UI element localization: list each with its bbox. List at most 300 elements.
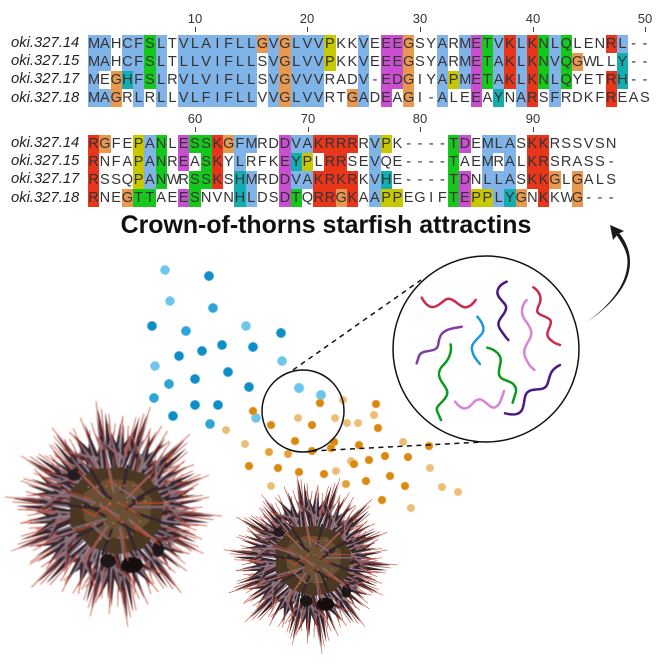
- sequence alignment: residues 1-50: N: [538, 54, 549, 70]
- sequence alignment: residues 1-50: S: [415, 36, 425, 52]
- sequence alignment: residues 1-50: D: [572, 90, 583, 106]
- sequence alignment: residues 1-50: T: [337, 90, 346, 106]
- sequence alignment: residues 1-50: F: [224, 90, 233, 106]
- sequence alignment: residues 51-97: H: [235, 172, 245, 188]
- magnifier circle: large with peptides: [393, 256, 579, 442]
- sequence alignment: residues 51-97: F: [438, 190, 447, 206]
- sequence alignment: residues 1-50: L: [517, 72, 525, 88]
- sequence alignment: residues 1-50: L: [157, 72, 165, 88]
- sequence alignment: residues 1-50: -: [642, 36, 647, 52]
- sequence alignment: residues 51-97: A: [505, 154, 515, 170]
- sequence alignment: residues 1-50: H: [111, 36, 121, 52]
- sequence alignment: residues 1-50: Y: [426, 54, 436, 70]
- sequence alignment: residues 51-97: A: [122, 154, 132, 170]
- sequence alignment: residues 1-50: -: [642, 54, 647, 70]
- sequence alignment: residues 51-97: L: [495, 172, 503, 188]
- sequence alignment: residues 51-97: L: [315, 154, 323, 170]
- sequence alignment: residues 51-97: N: [156, 154, 166, 170]
- sequence alignment: residues 51-97: D: [257, 190, 268, 206]
- sequence alignment: residues 51-97: -: [406, 154, 411, 170]
- sequence alignment: residues 1-50: E: [370, 54, 380, 70]
- sequence alignment: residues 51-97: A: [302, 172, 312, 188]
- sequence alignment: residues 1-50: V: [314, 36, 323, 52]
- sequence alignment: residues 1-50: S: [145, 36, 155, 52]
- sequence alignment: residues 51-97: R: [336, 136, 346, 152]
- sequence alignment: residues 51-97: -: [440, 154, 445, 170]
- sequence labels: top block: [11, 35, 80, 106]
- sequence alignment: residues 1-50: K: [528, 72, 537, 88]
- sequence alignment: residues 1-50: G: [279, 54, 291, 70]
- sequence alignment: residues 51-97: K: [348, 190, 357, 206]
- sequence alignment: residues 1-50: E: [471, 90, 481, 106]
- sequence alignment: residues 1-50: K: [336, 54, 346, 70]
- sequence labels: bottom block: oki.327.14: [11, 135, 79, 151]
- sequence alignment: residues 51-97: S: [100, 172, 110, 188]
- alignment ruler: bottom block: [188, 111, 540, 132]
- alignment ruler: top block: 10: [188, 11, 202, 26]
- sequence alignment: residues 51-97: H: [235, 190, 245, 206]
- sequence alignment: residues 1-50: K: [505, 36, 515, 52]
- sequence alignment: residues 1-50: C: [122, 36, 133, 52]
- sequence alignment: residues 1-50: G: [347, 90, 358, 106]
- sequence alignment: residues 51-97: E: [111, 190, 121, 206]
- sequence alignment: residues 51-97: E: [460, 190, 470, 206]
- sequence alignment: residues 1-50: G: [110, 90, 122, 106]
- sequence alignment: residues 1-50: I: [215, 72, 219, 88]
- sequence alignment: residues 51-97: R: [167, 154, 178, 170]
- sequence alignment: residues 51-97: N: [156, 172, 166, 188]
- sequence alignment: residues 51-97: L: [562, 172, 570, 188]
- alignment ruler: bottom block: 80: [413, 111, 427, 126]
- sequence alignment: residues 51-97: P: [482, 190, 492, 206]
- sequence alignment: residues 1-50: V: [269, 90, 278, 106]
- sequence alignment: residues 1-50: S: [258, 54, 267, 70]
- sequence alignment: residues 1-50: A: [100, 54, 110, 70]
- sequence alignment: residues 51-97: S: [561, 136, 571, 152]
- sequence alignment: residues 1-50: Y: [426, 36, 436, 52]
- sequence alignment: residues 1-50: L: [292, 36, 300, 52]
- sequence alignment: residues 1-50: -: [631, 72, 636, 88]
- sequence alignment: residues 51-97: M: [246, 136, 258, 152]
- sequence alignment: residues 51-97: A: [460, 154, 470, 170]
- sequence alignment: residues 51-97: S: [595, 154, 605, 170]
- sequence alignment: residues 1-50: L: [191, 54, 199, 70]
- sequence alignment: residues 1-50: A: [438, 90, 447, 106]
- sequence alignment: residues 51-97: -: [429, 154, 434, 170]
- sequence alignment: residues 51-97: P: [471, 190, 481, 206]
- sequence alignment: residues 51-97: F: [112, 154, 121, 170]
- sequence alignment: residues 51-97: -: [429, 172, 434, 188]
- sequence alignment: residues 1-50: V: [314, 72, 323, 88]
- sequence alignment: residues 51-97: M: [246, 172, 258, 188]
- sequence alignment: residues 1-50: V: [291, 72, 301, 88]
- sequence alignment: residues 1-50: V: [258, 90, 267, 106]
- sequence alignment: residues 51-97: D: [268, 136, 279, 152]
- sequence alignment: residues 51-97: S: [111, 172, 121, 188]
- orange attractin dots: [222, 396, 462, 512]
- magnifier circle: small: [262, 370, 344, 452]
- sequence alignment: residues 1-50: S: [640, 90, 650, 106]
- sequence alignment: residues 51-97: R: [88, 136, 99, 152]
- peptide: red: [422, 298, 476, 307]
- alignment ruler: top block: 50: [638, 11, 652, 26]
- peptide: blue: [472, 317, 483, 364]
- sequence labels: bottom block: [11, 135, 80, 206]
- sequence alignment: residues 1-50: M: [459, 54, 471, 70]
- sequence alignment: residues 51-97: R: [347, 172, 358, 188]
- blue attractin dots: [147, 265, 326, 429]
- alignment ruler: bottom block: 70: [301, 111, 315, 126]
- sequence alignment: residues 51-97: V: [584, 136, 593, 152]
- sequence alignment: residues 1-50: W: [583, 54, 597, 70]
- sequence alignment: residues 51-97: S: [606, 172, 616, 188]
- sequence alignment: residues 1-50: L: [551, 36, 559, 52]
- sequence alignment: residues 1-50: Y: [426, 72, 436, 88]
- sequence labels: top block: oki.327.15: [11, 53, 79, 69]
- sequence alignment: residues 1-50: P: [325, 36, 335, 52]
- sequence alignment: residues 1-50: E: [584, 72, 593, 88]
- sequence alignment: residues 51-97: -: [429, 136, 434, 152]
- sequence alignment: residues 51-97: K: [212, 136, 222, 152]
- sequence alignment: residues 1-50: -: [642, 72, 647, 88]
- sequence alignment: residues 51-97: E: [359, 154, 368, 170]
- sequence alignment: residues 1-50: G: [279, 36, 291, 52]
- sequence alignment: residues 51-97: P: [381, 190, 391, 206]
- sequence alignment: residues 51-97: A: [370, 190, 380, 206]
- sequence alignment: residues 1-50: L: [450, 90, 458, 106]
- sequence alignment: residues 1-50: F: [134, 72, 143, 88]
- sequence alignment: residues 51-97: M: [482, 136, 494, 152]
- sequence alignment: residues 1-50: H: [111, 54, 121, 70]
- sequence labels: top block: oki.327.18: [11, 90, 79, 106]
- sequence alignment: residues 1-50: E: [381, 72, 391, 88]
- sequence alignment: residues 1-50: G: [257, 36, 268, 52]
- sequence alignment: residues 1-50: L: [157, 54, 165, 70]
- sequence alignment: residues 51-97: R: [336, 154, 346, 170]
- sequence alignment: residues 51-97: T: [449, 154, 458, 170]
- sequence alignment: residues 51-97: -: [417, 154, 422, 170]
- sequence alignment: residues 51-97: E: [404, 190, 413, 206]
- curved arrow: [587, 225, 630, 322]
- starfish: small: [218, 468, 400, 658]
- sequence alignment: residues 51-97: N: [156, 136, 166, 152]
- alignment ruler: bottom block: 90: [526, 111, 540, 126]
- sequence alignment: residues 51-97: R: [325, 190, 335, 206]
- peptide: pink: [522, 300, 534, 370]
- sequence alignment: residues 51-97: E: [471, 136, 481, 152]
- sequence alignment: residues 51-97: R: [257, 172, 268, 188]
- sequence alignment: residues 51-97: K: [212, 172, 222, 188]
- sequence alignment: residues 1-50: A: [438, 54, 447, 70]
- sequence alignment: residues 51-97: L: [247, 190, 255, 206]
- sequence alignment: residues 51-97: G: [99, 136, 111, 152]
- sequence alignment: residues 1-50: A: [438, 72, 447, 88]
- sequence alignment: residues 1-50: F: [134, 54, 143, 70]
- sequence alignment: residues 1-50: L: [180, 54, 188, 70]
- sequence alignment: residues 1-50: M: [459, 72, 471, 88]
- sequence alignment: residues 51-97: Q: [122, 172, 133, 188]
- sequence alignment: residues 1-50: L: [517, 36, 525, 52]
- title: Crown-of-thorns starfish attractins: [121, 211, 531, 239]
- sequence alignment: residues 1-50: V: [302, 72, 312, 88]
- peptide: green 2: [487, 348, 516, 403]
- sequence alignment: residues 1-50: R: [606, 36, 616, 52]
- sequence alignment: residues 51-97: A: [145, 136, 155, 152]
- sequence alignment: residues 1-50: G: [279, 90, 291, 106]
- sequence alignment: residues 51-97: V: [370, 136, 380, 152]
- sequence alignment: residues 51-97: T: [449, 190, 458, 206]
- sequence alignment: residues 51-97: P: [134, 136, 143, 152]
- sequence alignment: residues 1-50: V: [269, 54, 278, 70]
- sequence alignment: residues 51-97: K: [539, 190, 548, 206]
- sequence alignment: residues 1-50: E: [471, 54, 481, 70]
- sequence alignment: residues 1-50: G: [403, 72, 414, 88]
- peptide: pink 2: [455, 391, 504, 408]
- sequence alignment: residues 51-97: S: [224, 172, 233, 188]
- sequence alignment: residues 51-97: S: [269, 190, 278, 206]
- sequence alignment: residues 1-50: E: [471, 72, 481, 88]
- sequence alignment: residues 1-50: A: [201, 36, 211, 52]
- alignment ruler: top block: 30: [413, 11, 427, 26]
- sequence alignment: residues 51-97: H: [381, 172, 391, 188]
- sequence alignment: residues 1-50: P: [449, 72, 458, 88]
- sequence alignment: residues 1-50: I: [418, 72, 422, 88]
- sequence alignment: residues 1-50: E: [392, 36, 402, 52]
- sequence alignment: residues 1-50: V: [179, 90, 188, 106]
- sequence alignment: residues 51-97: R: [178, 172, 189, 188]
- sequence alignment: residues 51-97: F: [112, 136, 121, 152]
- sequence alignment: residues 1-50: A: [359, 90, 368, 106]
- sequence alignment: residues 1-50: K: [505, 72, 515, 88]
- sequence alignment: residues 51-97: K: [528, 136, 537, 152]
- sequence alignment: residues 51-97: A: [302, 136, 312, 152]
- sequence alignment: residues 51-97: K: [212, 154, 222, 170]
- sequence alignment: residues 51-97: Y: [291, 154, 301, 170]
- sequence alignment: residues 1-50: A: [494, 72, 503, 88]
- sequence alignment: residues 51-97: A: [156, 190, 166, 206]
- sequence alignment: residues 51-97: -: [586, 190, 591, 206]
- sequence alignment: residues 1-50: C: [122, 54, 133, 70]
- sequence alignment: residues 51-97: D: [460, 172, 470, 188]
- sequence alignment: residues 1-50: L: [607, 54, 615, 70]
- sequence alignment: residues 1-50: V: [494, 36, 503, 52]
- sequence alignment: residues 51-97: S: [550, 154, 560, 170]
- sequence alignment: residues 1-50: I: [418, 90, 422, 106]
- sequence alignment: residues 1-50: G: [572, 54, 583, 70]
- sequence alignment: residues 51-97: S: [201, 172, 211, 188]
- sequence alignment: residues 51-97: V: [370, 172, 380, 188]
- sequence alignment: residues 1-50: L: [135, 90, 143, 106]
- peptide: dark purple 2: [505, 365, 560, 415]
- sequence alignment: residues 1-50: V: [201, 72, 211, 88]
- peptide: green: [437, 344, 451, 420]
- sequence alignment: residues 1-50: I: [215, 90, 219, 106]
- starfish: large: [0, 395, 225, 632]
- sequence alignment: residues 51-97: R: [325, 136, 335, 152]
- sequence alignment: residues 51-97: -: [440, 136, 445, 152]
- sequence alignment: residues 1-50: N: [538, 36, 549, 52]
- sequence alignment: residues 1-50: L: [618, 36, 626, 52]
- sequence alignment: residues 51-97: S: [190, 172, 200, 188]
- sequence alignment: residues 1-50: V: [269, 72, 278, 88]
- sequence alignment: residues 1-50: E: [618, 90, 627, 106]
- sequence alignment: residues 1-50: T: [168, 36, 177, 52]
- sequence alignment: residues 1-50: V: [359, 72, 368, 88]
- sequence alignment: residues 1-50: D: [392, 72, 403, 88]
- sequence alignment: residues 51-97: Y: [505, 190, 515, 206]
- sequence alignment: residues 51-97: D: [268, 172, 279, 188]
- sequence alignment: residues 1-50: A: [516, 90, 526, 106]
- sequence alignment: residues 51-97: D: [280, 172, 290, 188]
- sequence alignment: residues 51-97: R: [550, 136, 560, 152]
- sequence alignment: residues 51-97: N: [223, 190, 234, 206]
- sequence labels: top block: oki.327.14: [11, 35, 79, 51]
- sequence alignment: residues 1-50: R: [448, 54, 459, 70]
- sequence alignment: residues 1-50: N: [505, 90, 515, 106]
- sequence alignment: residues 51-97: G: [223, 136, 234, 152]
- sequence alignment: residues 1-50: K: [528, 54, 537, 70]
- sequence alignment: residues 1-50: Y: [572, 72, 582, 88]
- sequence alignment: residues 51-97: M: [482, 154, 494, 170]
- sequence alignment: residues 51-97: -: [597, 190, 602, 206]
- sequence alignment: residues 51-97: A: [145, 154, 155, 170]
- sequence alignment: residues 1-50: M: [459, 36, 471, 52]
- sequence alignment: residues 1-50: L: [157, 36, 165, 52]
- sequence alignment: residues 51-97: K: [359, 172, 368, 188]
- alignment ruler: top block: 20: [300, 11, 314, 26]
- sequence alignment: residues 1-50: L: [236, 36, 244, 52]
- sequence alignment: residues 51-97: Q: [380, 154, 392, 170]
- sequence alignment: residues 1-50: F: [224, 54, 233, 70]
- sequence alignment: residues 51-97: R: [88, 172, 99, 188]
- sequence alignment: residues 51-97: G: [122, 190, 133, 206]
- sequence alignment: residues 1-50: G: [403, 36, 414, 52]
- sequence labels: top block: oki.327.17: [11, 71, 79, 87]
- sequence alignment: residues 51-97: L: [495, 136, 503, 152]
- sequence alignment: residues 51-97: G: [414, 190, 426, 206]
- sequence alignment: residues 1-50: V: [269, 36, 278, 52]
- sequence alignment: residues 1-50: V: [179, 72, 188, 88]
- sequence alignment: residues 1-50: Y: [618, 54, 627, 70]
- sequence alignment: residues 1-50: F: [550, 90, 559, 106]
- sequence alignment: residues 1-50: S: [258, 72, 267, 88]
- sequence alignment: residues 51-97: R: [538, 154, 549, 170]
- sequence alignment: residues 1-50: K: [348, 54, 357, 70]
- sequence alignment: residues 1-50: V: [201, 54, 211, 70]
- sequence alignment: residues 51-97: S: [572, 136, 582, 152]
- sequence alignment: residues 51-97: -: [609, 190, 614, 206]
- sequence alignment: residues 1-50: E: [471, 36, 481, 52]
- sequence alignment: residues 1-50: -: [429, 90, 434, 106]
- sequence alignment: residues 1-50: T: [483, 36, 492, 52]
- sequence alignment: residues 1-50: L: [573, 36, 581, 52]
- sequence alignment: residues 51-97: P: [134, 154, 143, 170]
- sequence alignment: residues 1-50: L: [517, 54, 525, 70]
- sequence alignment: residues 1-50: K: [528, 36, 537, 52]
- sequence alignment: residues 1-50: A: [629, 90, 638, 106]
- sequence alignment: residues 1-50: D: [370, 90, 380, 106]
- sequence alignment: residues 51-97: K: [528, 154, 537, 170]
- sequence alignment: residues 1-50: L: [157, 90, 165, 106]
- sequence alignment: residues 51-97: A: [190, 154, 200, 170]
- sequence alignment: residues 1-50: T: [595, 72, 604, 88]
- sequence alignment: residues 51-97: S: [584, 154, 593, 170]
- sequence alignment: residues 51-97: -: [609, 154, 614, 170]
- sequence alignment: residues 51-97: V: [291, 136, 301, 152]
- sequence alignment: residues 1-50: S: [539, 90, 548, 106]
- sequence alignment: residues 51-97: T: [134, 190, 143, 206]
- sequence alignment: residues 1-50: E: [100, 72, 110, 88]
- sequence alignment: residues 1-50: -: [631, 36, 636, 52]
- sequence alignment: residues 1-50: R: [122, 90, 133, 106]
- sequence alignment: residues 1-50: L: [191, 36, 199, 52]
- sequence alignment: residues 51-97: K: [528, 172, 537, 188]
- sequence alignment: residues 51-97: E: [392, 172, 402, 188]
- sequence alignment: residues 1-50: A: [100, 90, 110, 106]
- sequence alignment: residues 1-50: V: [314, 54, 323, 70]
- sequence alignment: residues 1-50: D: [347, 72, 358, 88]
- sequence alignment: residues 1-50: -: [631, 54, 636, 70]
- sequence alignment: residues 51-97: R: [88, 154, 99, 170]
- sequence alignment: residues 51-97: F: [235, 136, 244, 152]
- sequence alignment: residues 1-50: F: [134, 36, 143, 52]
- sequence alignment: residues 1-50: E: [381, 36, 391, 52]
- sequence alignment: residues 51-97: S: [190, 136, 200, 152]
- sequence alignment: residues 1-50: R: [606, 90, 616, 106]
- sequence alignment: residues 51-97: [88, 135, 616, 207]
- sequence alignment: residues 1-50: M: [88, 90, 100, 106]
- sequence alignment: residues 1-50: L: [191, 90, 199, 106]
- sequence alignment: residues 51-97: Y: [224, 154, 233, 170]
- sequence alignment: residues 1-50: L: [191, 72, 199, 88]
- sequence alignment: residues 51-97: S: [516, 136, 526, 152]
- sequence alignment: residues 1-50: L: [247, 72, 255, 88]
- sequence alignment: residues 1-50: R: [448, 36, 459, 52]
- sequence alignment: residues 1-50: M: [88, 72, 100, 88]
- sequence alignment: residues 1-50: R: [325, 72, 335, 88]
- sequence alignment: residues 1-50: L: [247, 54, 255, 70]
- sequence alignment: residues 1-50: N: [538, 72, 549, 88]
- sequence alignment: residues 1-50: V: [302, 54, 312, 70]
- sequence alignment: residues 51-97: V: [212, 190, 222, 206]
- sequence alignment: residues 51-97: R: [257, 136, 268, 152]
- sequence alignment: residues 1-50: A: [438, 36, 447, 52]
- peptide: medium purple: [417, 327, 462, 363]
- sequence alignment: residues 51-97: N: [527, 190, 538, 206]
- sequence alignment: residues 1-50: I: [215, 36, 219, 52]
- sequence alignment: residues 1-50: F: [224, 36, 233, 52]
- sequence alignment: residues 51-97: S: [190, 190, 200, 206]
- sequence alignment: residues 1-50: L: [236, 72, 244, 88]
- sequence alignment: residues 51-97: A: [505, 136, 515, 152]
- sequence alignment: residues 51-97: P: [392, 190, 402, 206]
- sequence alignment: residues 1-50: M: [88, 36, 100, 52]
- sequence alignment: residues 1-50: K: [505, 54, 515, 70]
- sequence alignment: residues 1-50: E: [381, 54, 391, 70]
- sequence alignment: residues 51-97: D: [460, 136, 470, 152]
- sequence alignment: residues 51-97: G: [336, 190, 347, 206]
- sequence alignment: residues 1-50: L: [236, 54, 244, 70]
- sequence alignment: residues 51-97: N: [100, 154, 110, 170]
- sequence alignment: residues 51-97: W: [560, 190, 574, 206]
- sequence alignment: residues 51-97: Q: [302, 190, 313, 206]
- sequence alignment: residues 1-50: S: [145, 54, 155, 70]
- sequence alignment: residues 1-50: F: [202, 90, 211, 106]
- sequence alignment: residues 1-50: [88, 35, 650, 107]
- sequence alignment: residues 51-97: K: [550, 190, 560, 206]
- sequence alignment: residues 51-97: R: [325, 154, 335, 170]
- sequence alignment: residues 1-50: R: [561, 90, 571, 106]
